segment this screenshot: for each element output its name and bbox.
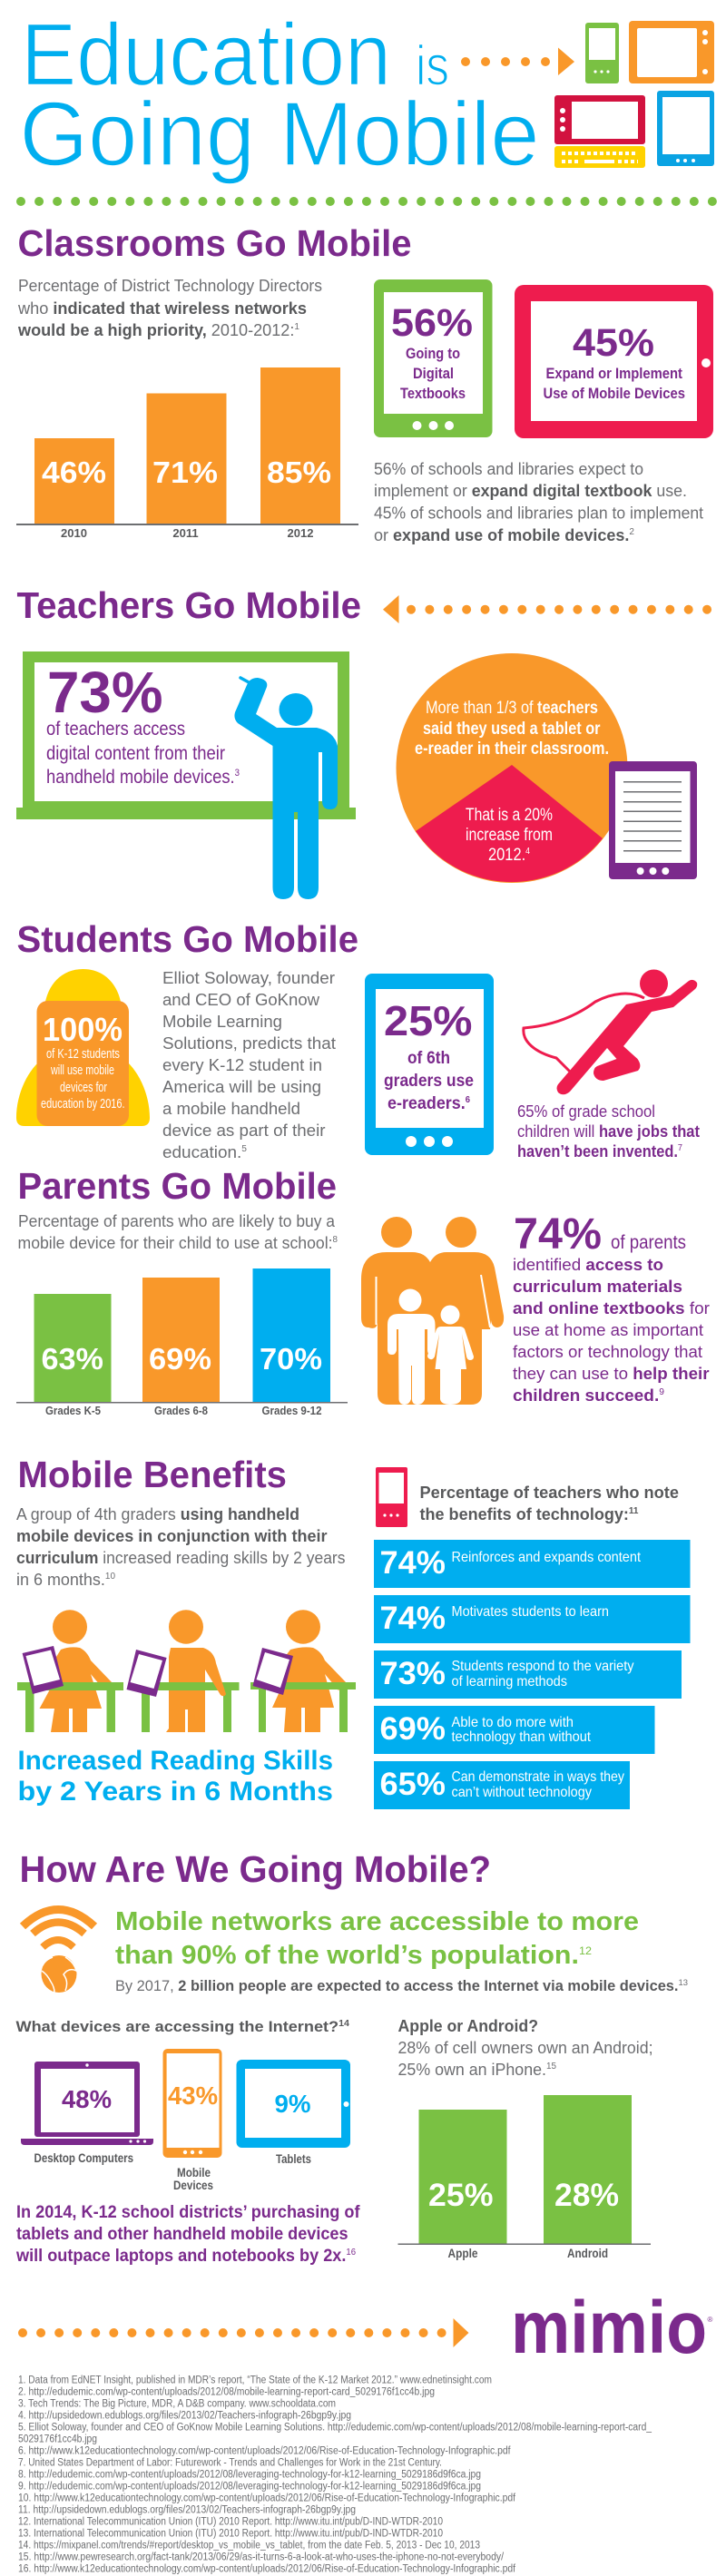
text block: footnotes: 7. United States Department of Labor: Futurework - Trends and Challenges for Work in the 21st Century.: [18, 2458, 442, 2469]
text block: wireless priority intro: 1: [294, 322, 299, 332]
text block: 2 billion people: 13: [678, 1978, 688, 1988]
icon: red phone: [376, 1467, 407, 1527]
chart: orange and red pie: That is a 20%: [466, 806, 553, 825]
text block: Elliot Soloway prediction: America will be using: [162, 1077, 321, 1096]
text block: apple or android: 28% of cell owners own an Android;: [397, 2039, 653, 2057]
text block: jobs not invented: children will have jobs that: [517, 1122, 700, 1141]
panel: 25% e-reader tablet: e-readers.: [388, 1094, 470, 1113]
bar chart: apple vs android: 28%: [554, 2178, 619, 2213]
icon: red and yellow laptop: [554, 95, 645, 168]
bar chart: parents by grade: Grades K-5: [45, 1404, 101, 1417]
panel: 56% digital textbooks tablet: [374, 279, 492, 437]
panel: chalkboard with 73%: 3: [235, 768, 240, 779]
panel: 45% mobile devices tablet: [515, 285, 713, 438]
text block: footnotes: 15. http://www.pewresearch.org/fact-tank/2013/06/29/as-it-turns-6-a-look-at-who-uses-the-iphone-no-not-everybody/: [18, 2552, 505, 2563]
bar: able to do more: technology than without: [452, 1729, 591, 1745]
panel: 56% digital textbooks tablet: Going to: [406, 345, 460, 362]
callout: 2014 purchasing: will outpace laptops and notebooks by 2x.: [16, 2247, 362, 2266]
text block: schools and libraries: 45% of schools and libraries plan to implement: [374, 504, 703, 523]
panel: chalkboard with 73%: digital content from their: [46, 743, 225, 764]
text block: wireless priority intro: Percentage of District Technology Directors: [18, 277, 322, 295]
logo: mimio: mimio: [511, 2287, 707, 2369]
panel: 100% rocket: education by 2016.: [41, 1097, 125, 1112]
text block: schools and libraries: or expand use of mobile devices.: [374, 526, 629, 544]
panel: 25% e-reader tablet: graders use: [384, 1072, 474, 1091]
text block: Elliot Soloway prediction: every K-12 student in: [162, 1055, 322, 1074]
bar: able to do more: 69%: [379, 1711, 446, 1747]
panel: 100% rocket: will use mobile: [50, 1063, 114, 1078]
text block: Elliot Soloway prediction: Elliot Soloway, founder: [162, 968, 335, 987]
text block: schools and libraries: implement or expand digital textbook use.: [374, 482, 687, 500]
heading: classrooms: Classrooms Go Mobile: [18, 222, 412, 264]
panel: chalkboard with 73%: [16, 651, 356, 819]
panel: 45% mobile devices tablet: 45%: [573, 321, 654, 365]
panel: 100% rocket: of K-12 students: [46, 1047, 120, 1062]
text block: footnotes: 12. International Telecommunication Union (ITU) 2010 Report. http://www.itu.int/pub/D-IND-WTDR-2010: [18, 2517, 443, 2528]
callout: 2014 purchasing: tablets and other handheld mobile devices: [16, 2225, 348, 2244]
callout: increased reading skills: Increased Reading Skills: [18, 1746, 333, 1776]
title: Going Mobile: [20, 83, 539, 185]
text block: Elliot Soloway prediction: [162, 968, 336, 1161]
text block: 74% of parents: 9: [659, 1387, 664, 1397]
text block: apple or android: 25% own an iPhone.: [397, 2061, 548, 2079]
callout: 2014 purchasing: In 2014, K-12 school districts’ purchasing of: [16, 2203, 360, 2222]
chart: orange and red pie: More than 1/3 of teachers: [426, 699, 598, 718]
bar chart: wireless priority 2010-2012: [16, 367, 358, 540]
bar chart: apple vs android: Apple: [448, 2246, 478, 2260]
text block: jobs not invented: 65% of grade school: [517, 1102, 655, 1121]
text block: wireless priority intro: would be a high priority, 2010-2012:: [18, 321, 294, 339]
text block: footnotes: 5. Elliot Soloway, founder and CEO of GoKnow Mobile Learning Solutions. http://edudemic.com/wp-content/uploads/2012/08/mobile-learning-report-card_: [18, 2423, 652, 2434]
bar chart: apple vs android: [397, 2095, 651, 2260]
bar: variety of learning methods: Students respond to the variety: [452, 1659, 633, 1674]
panel: 100% rocket: devices for: [60, 1081, 107, 1095]
callout: 2014 purchasing: [15, 2203, 360, 2266]
text block: 74% of parents: children succeed.: [513, 1386, 654, 1405]
icon: student one: [17, 1610, 123, 1732]
text block: wireless priority intro: who indicated that wireless networks: [17, 299, 307, 318]
icon: teacher figure: [234, 678, 338, 899]
callout: mobile networks: [115, 1907, 639, 1970]
panel: 100% rocket: 100%: [43, 1011, 123, 1048]
icon: phone 43% mobile devices: [163, 2049, 221, 2192]
icon: superhero: [524, 969, 697, 1094]
text block: footnotes: 13. International Telecommunication Union (ITU) 2010 Report. http://www.itu.int/pub/D-IND-WTDR-2010: [18, 2529, 443, 2540]
chart: orange and red pie: increase from: [466, 826, 553, 845]
bar: reinforces content: [374, 1540, 690, 1588]
heading: what devices: What devices are accessing the Internet?: [16, 2018, 319, 2035]
panel: 25% e-reader tablet: [365, 974, 494, 1155]
text block: benefits heading: [419, 1484, 679, 1523]
icon: blue tablet: [657, 91, 714, 166]
text block: Elliot Soloway prediction: and CEO of GoKnow: [162, 990, 320, 1009]
text block: 74% of parents: identified access to: [513, 1255, 663, 1274]
icon: laptop 48% desktop computers: Desktop Computers: [34, 2150, 133, 2165]
text block: 74% of parents: [513, 1210, 710, 1405]
text block: 74% of parents: of parents: [611, 1232, 686, 1253]
panel: chalkboard with 73%: handheld mobile devices.: [46, 767, 261, 788]
logo: mimio: ®: [708, 2316, 713, 2324]
bar chart: apple vs android: 25%: [428, 2178, 494, 2213]
bar chart: teacher benefits: [374, 1540, 690, 1809]
panel: 45% mobile devices tablet: Use of Mobile Devices: [543, 385, 685, 402]
chart: orange and red pie: [396, 653, 628, 883]
bar chart: apple vs android: Android: [567, 2246, 608, 2260]
panel: 56% digital textbooks tablet: Digital: [413, 365, 454, 382]
text block: Elliot Soloway prediction: 5: [241, 1144, 247, 1154]
text block: Elliot Soloway prediction: Mobile Learning: [162, 1012, 282, 1031]
text block: parents intro: mobile device for their child to use at school:: [18, 1234, 339, 1252]
callout: mobile networks: 12: [579, 1944, 592, 1957]
bar: able to do more: [374, 1706, 655, 1754]
text block: apple or android: [397, 2017, 653, 2079]
bar chart: wireless priority 2010-2012: 85%: [267, 455, 331, 489]
icon: laptop 48% desktop computers: 48%: [62, 2085, 112, 2113]
text block: schools and libraries: 2: [629, 527, 634, 537]
text block: footnotes: 6. http://www.k12educationtechnology.com/wp-content/uploads/2012/06/Rise-of-Education-Technology-Infographic.pdf: [18, 2446, 511, 2457]
text block: 74% of parents: use at home as important: [513, 1320, 703, 1339]
text block: benefits heading: Percentage of teachers who note: [419, 1484, 679, 1502]
text block: apple or android: 15: [546, 2062, 556, 2072]
icon: orange tablet: [629, 21, 714, 83]
panel: 25% e-reader tablet: 6: [466, 1095, 470, 1105]
callout: mobile networks: than 90% of the world’s population.: [115, 1941, 557, 1970]
text block: jobs not invented: haven’t been invented.: [517, 1142, 693, 1161]
chart: orange and red pie: 2012.: [488, 846, 532, 865]
text block: benefits heading: the benefits of technology:: [419, 1505, 629, 1523]
bar chart: wireless priority 2010-2012: 2011: [172, 526, 199, 540]
bar chart: parents by grade: 63%: [42, 1342, 103, 1376]
icon: tablet 9%: Tablets: [276, 2151, 311, 2166]
text block: jobs not invented: 7: [678, 1143, 682, 1153]
text block: 2 billion people: By 2017, 2 billion people are expected to access the Internet via mobile devices.: [115, 1978, 682, 1994]
text block: wireless priority intro: [17, 277, 322, 339]
heading: teachers: Teachers Go Mobile: [16, 584, 361, 626]
chart: orange and red pie: e-reader in their classroom.: [415, 739, 609, 759]
chart: orange and red pie: 4: [525, 847, 530, 857]
text block: parents intro: Percentage of parents who are likely to buy a: [18, 1212, 336, 1230]
text block: 4th graders: curriculum increased reading skills by 2 years: [16, 1549, 345, 1567]
text block: footnotes: 10. http://www.k12educationtechnology.com/wp-content/uploads/2012/06/Rise-of-Education-Technology-Infographic.pdf: [18, 2493, 516, 2504]
text block: footnotes: 11. http://upsidedown.edublogs.org/files/2013/02/Teachers-infograph-26bgp9y.jpg: [18, 2505, 356, 2516]
icon: wifi globe: [23, 1909, 94, 1993]
bar chart: parents by grade: [16, 1268, 348, 1417]
text block: schools and libraries: [374, 460, 703, 544]
icon: tablet 9%: [236, 2060, 350, 2166]
bar: demonstrate in ways: can’t without technology: [452, 1785, 592, 1800]
bar: variety of learning methods: [374, 1650, 682, 1699]
text block: parents intro: [18, 1212, 338, 1252]
callout: increased reading skills: by 2 Years in 6 Months: [18, 1777, 333, 1807]
text block: 4th graders: [16, 1505, 345, 1589]
illustration: students at desks with tablets: [17, 1610, 356, 1732]
text block: footnotes: 1. Data from EdNET Insight, published in MDR’s report, “The State of the K-12 Market 2012.” www.ednetinsight.com: [18, 2375, 492, 2386]
bar chart: parents by grade: 70%: [260, 1342, 322, 1376]
heading: how are we going mobile: How Are We Going Mobile?: [20, 1848, 491, 1890]
bar chart: wireless priority 2010-2012: 2010: [61, 526, 87, 540]
title: is: [416, 34, 449, 98]
icon: student three: [250, 1610, 356, 1732]
bar chart: wireless priority 2010-2012: 46%: [42, 455, 106, 489]
heading: mobile benefits: Mobile Benefits: [18, 1454, 287, 1495]
bar: demonstrate in ways: 65%: [379, 1767, 446, 1802]
title: Education: [21, 5, 391, 103]
text block: Elliot Soloway prediction: a mobile handheld: [162, 1099, 300, 1118]
chart: orange and red pie: said they used a tablet or: [423, 720, 601, 739]
text block: benefits heading: 11: [629, 1506, 639, 1516]
text block: apple or android: Apple or Android?: [397, 2017, 538, 2035]
panel: 56% digital textbooks tablet: Textbooks: [400, 385, 466, 402]
panel: chalkboard with 73%: of teachers access: [46, 719, 185, 739]
text block: 4th graders: A group of 4th graders using handheld: [16, 1505, 299, 1523]
bar: reinforces content: 74%: [379, 1545, 446, 1581]
bar: variety of learning methods: 73%: [379, 1656, 446, 1691]
text block: 4th graders: mobile devices in conjunction with their: [16, 1527, 327, 1545]
icon: green phone: [585, 23, 619, 83]
bar chart: parents by grade: Grades 9-12: [261, 1404, 321, 1417]
text block: 74% of parents: they can use to help their: [513, 1364, 710, 1383]
text block: jobs not invented: [517, 1102, 700, 1161]
text block: Elliot Soloway prediction: education.: [162, 1142, 240, 1161]
panel: chalkboard with 73%: 73%: [47, 660, 163, 725]
text block: footnotes: 2. http://edudemic.com/wp-content/uploads/2012/08/mobile-learning-report-card_5029176f1cc4b.jpg: [18, 2387, 435, 2398]
text block: footnotes: 4. http://upsidedown.edublogs.org/files/2013/02/Teachers-infograph-26bgp9y.jpg: [18, 2411, 351, 2422]
bar: able to do more: Able to do more with: [452, 1715, 574, 1730]
text block: footnotes: 14. https://mixpanel.com/trends/#report/desktop_vs_mobile_vs_tablet, from the date Feb. 5, 2013 - Dec 10, 2013: [18, 2541, 480, 2552]
text block: footnotes: 16. http://www.k12educationtechnology.com/wp-content/uploads/2012/06/Rise-of-Education-Technology-Infographic.pdf: [18, 2564, 516, 2575]
text block: 4th graders: in 6 months.: [16, 1571, 105, 1589]
icon: laptop 48% desktop computers: [21, 2062, 153, 2165]
text block: Elliot Soloway prediction: device as part of their: [162, 1121, 325, 1140]
callout: 2014 purchasing: 16: [346, 2248, 356, 2258]
text block: parents intro: 8: [333, 1235, 338, 1245]
icon: family: [361, 1217, 504, 1405]
text block: 74% of parents: 74%: [514, 1210, 602, 1259]
text block: 74% of parents: and online textbooks for: [513, 1298, 710, 1317]
icon: phone 43% mobile devices: Mobile: [177, 2165, 211, 2179]
text block: Elliot Soloway prediction: Solutions, predicts that: [162, 1033, 336, 1053]
icon: student two: [127, 1610, 240, 1732]
bar: motivates students: 74%: [379, 1601, 446, 1636]
icon: tablet 9%: 9%: [274, 2090, 311, 2118]
arrow: footer dotted arrow: [23, 2318, 468, 2347]
text block: footnotes: 9. http://edudemic.com/wp-content/uploads/2012/08/leveraging-technology-for-k12-learning_5029186d9f6ca.jpg: [18, 2482, 481, 2493]
text block: schools and libraries: 56% of schools and libraries expect to: [374, 460, 643, 478]
arrow: teachers dotted arrow: [383, 595, 708, 623]
bar chart: parents by grade: Grades 6-8: [154, 1404, 208, 1417]
heading: students: Students Go Mobile: [16, 918, 358, 960]
bar chart: parents by grade: 69%: [149, 1342, 211, 1376]
icon: phone 43% mobile devices: 43%: [168, 2081, 218, 2110]
panel: 45% mobile devices tablet: Expand or Implement: [546, 365, 682, 382]
arrow: title dotted arrow: [461, 47, 574, 75]
heading: what devices: 14: [338, 2019, 349, 2029]
panel: 25% e-reader tablet: 25%: [384, 997, 472, 1044]
bar: demonstrate in ways: Can demonstrate in ways they: [452, 1769, 624, 1785]
bar: motivates students: [374, 1595, 690, 1643]
panel: 100% rocket: [16, 969, 150, 1126]
bar: reinforces content: Reinforces and expands content: [452, 1550, 642, 1565]
panel: 25% e-reader tablet: of 6th: [407, 1049, 450, 1068]
text block: 74% of parents: factors or technology that: [513, 1342, 702, 1361]
panel: 56% digital textbooks tablet: 56%: [391, 301, 473, 345]
text block: footnotes: 3. Tech Trends: The Big Picture, MDR, A D&B company. www.schooldata.com: [18, 2399, 336, 2410]
bar chart: wireless priority 2010-2012: 71%: [152, 455, 218, 489]
bar: demonstrate in ways: [374, 1761, 630, 1809]
text block: 74% of parents: curriculum materials: [513, 1277, 682, 1296]
text block: footnotes: 5029176f1cc4b.jpg: [18, 2434, 97, 2445]
callout: mobile networks: Mobile networks are accessible to more: [115, 1907, 639, 1936]
title: [20, 5, 539, 185]
bar chart: wireless priority 2010-2012: 2012: [288, 526, 313, 540]
text block: 4th graders: 10: [105, 1572, 115, 1582]
text block: footnotes: [18, 2375, 652, 2575]
text block: footnotes: 8. http://edudemic.com/wp-content/uploads/2012/08/leveraging-technology-for-k12-learning_5029186d9f6ca.jpg: [18, 2470, 481, 2481]
callout: increased reading skills: [18, 1746, 333, 1807]
icon: e-reader: [609, 761, 697, 879]
bar: motivates students: Motivates students to learn: [452, 1604, 609, 1620]
icon: phone 43% mobile devices: Devices: [173, 2178, 213, 2192]
heading: parents: Parents Go Mobile: [18, 1165, 337, 1207]
bar: variety of learning methods: of learning methods: [452, 1674, 567, 1690]
